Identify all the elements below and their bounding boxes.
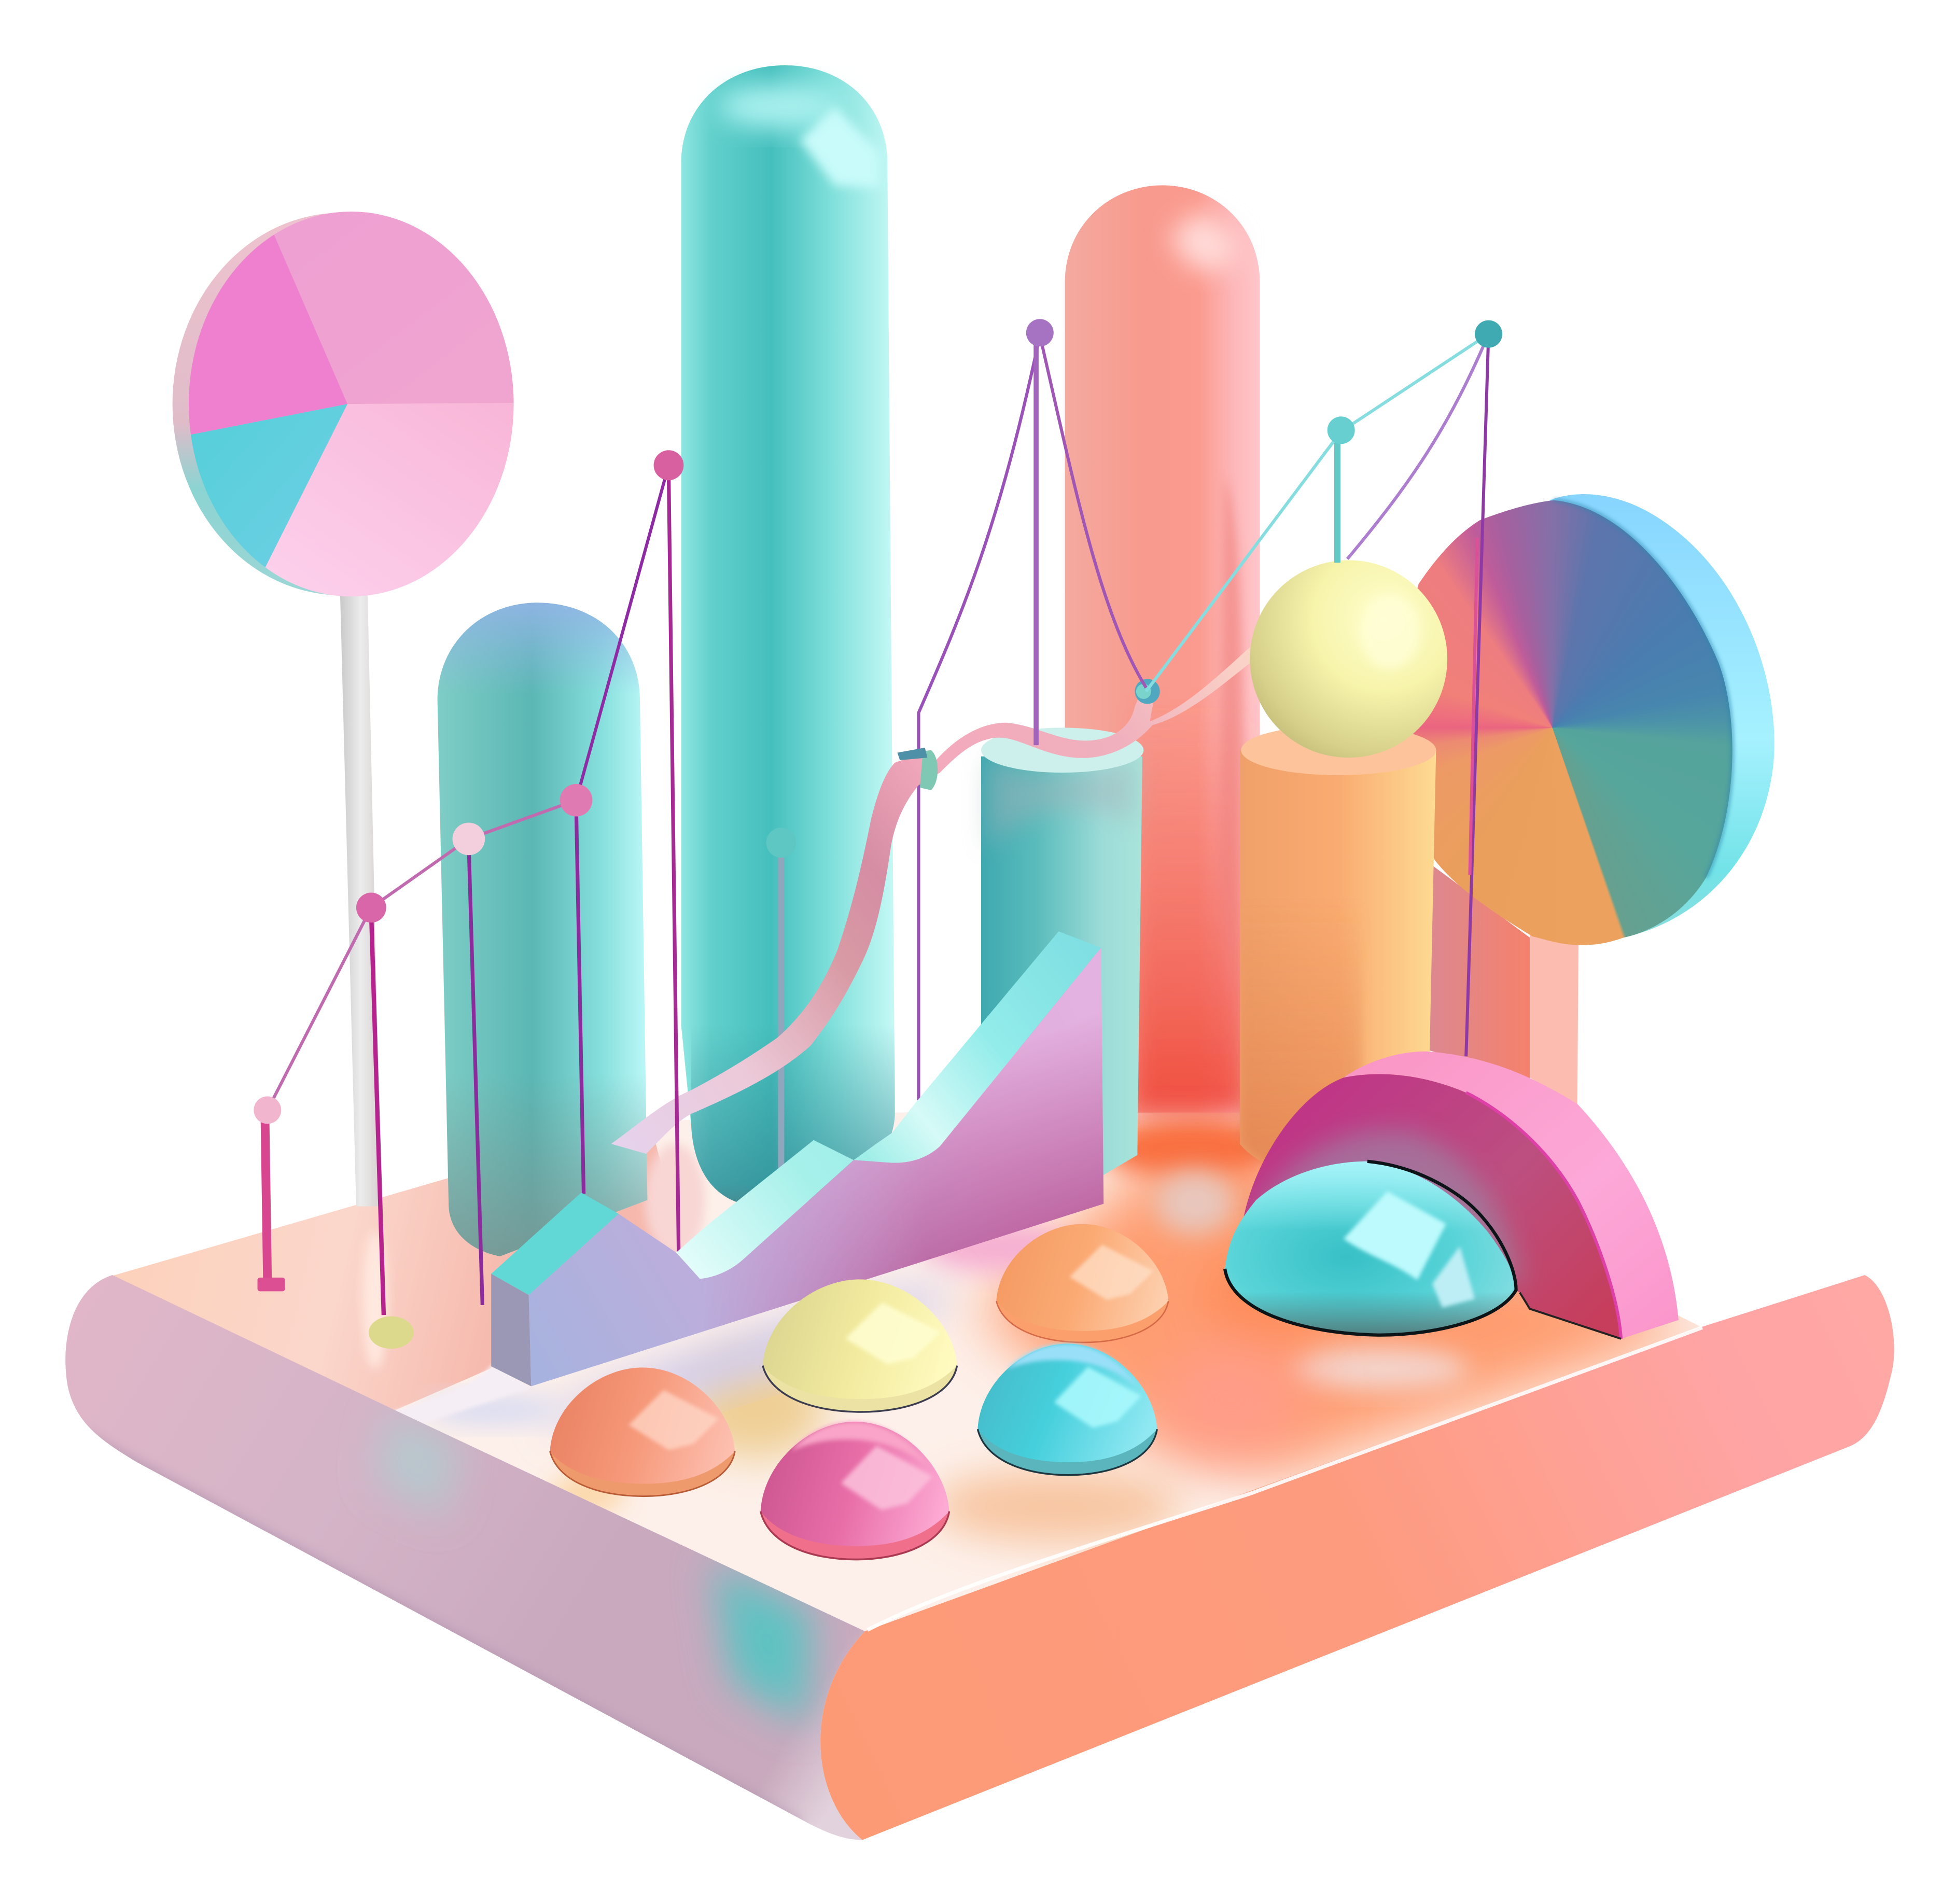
short cyan cylinder: [981, 727, 1143, 1177]
dome: orange front: [550, 1367, 735, 1496]
area chart left side: [491, 1274, 531, 1387]
dome: pink: [761, 1422, 949, 1560]
platform right face: [820, 1275, 1894, 1840]
tall pink bar: [1065, 185, 1260, 1113]
arch dome reflection: [1250, 1130, 1525, 1287]
ribbon line: [611, 644, 1253, 1154]
area chart top band: [676, 931, 1101, 1279]
arch inner face: [1244, 1074, 1621, 1339]
platform left face: [65, 1275, 865, 1844]
line chart markers: [254, 319, 1502, 1349]
orange cylinder: [1240, 725, 1436, 1169]
dome outline: [1225, 1161, 1516, 1335]
platform top surface: [106, 1100, 1702, 1631]
pie slice: light pink: [237, 403, 537, 613]
dome: yellow: [763, 1279, 957, 1412]
dome highlight: [1344, 1192, 1446, 1280]
arch inner edge: [1466, 1093, 1621, 1339]
thin vertical pins behind ribbon: [781, 335, 1040, 1172]
line chart: left magenta pins: [265, 334, 1489, 1315]
arch floor shadow: [1520, 1293, 1621, 1339]
platform front highlight edge: [868, 1327, 1702, 1630]
dome: cyan: [977, 1344, 1157, 1475]
lollipop stem: [340, 587, 381, 1206]
right pie disc: [1413, 494, 1775, 945]
yellow sphere: [1250, 560, 1447, 758]
left pie chart lollipop: [162, 188, 537, 1206]
disc face rim shadow: [1554, 500, 1733, 878]
ribbon clips: [898, 679, 1160, 790]
dome highlight small: [1432, 1247, 1475, 1308]
pie slice: cyan: [162, 404, 347, 613]
pie slice: magenta: [162, 188, 347, 440]
area chart front face: [529, 948, 1103, 1387]
disc side: [173, 213, 510, 595]
arch outer band: [1344, 1052, 1679, 1339]
pie slice: top pink: [254, 188, 537, 404]
area chart front face shading: [700, 948, 1103, 1333]
dome: orange back: [996, 1224, 1168, 1342]
area chart: [491, 931, 1103, 1387]
platform base: [65, 1100, 1894, 1844]
pink arch: [1244, 1052, 1679, 1339]
pie slices: [162, 188, 537, 613]
teal line pin from sphere: [1336, 431, 1338, 563]
disc face: blended pie slices: [1375, 475, 1775, 975]
disc side: [1550, 494, 1775, 937]
area chart left top: [491, 1193, 619, 1295]
left teal bar: [438, 603, 647, 1256]
right disc rear stem: [1429, 863, 1578, 1105]
tall cyan bar: [681, 65, 895, 1206]
large teal dome: [1225, 1161, 1516, 1335]
